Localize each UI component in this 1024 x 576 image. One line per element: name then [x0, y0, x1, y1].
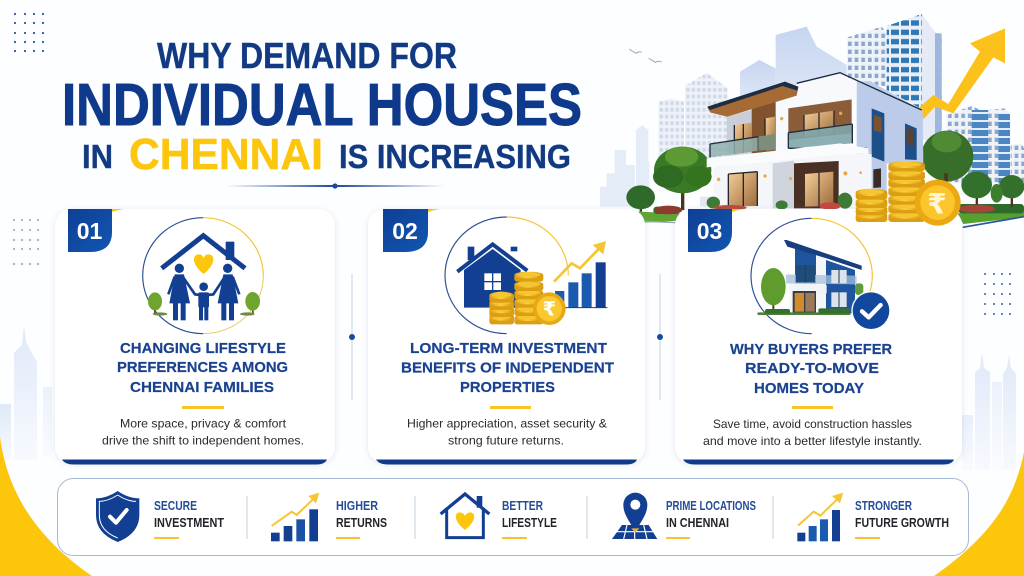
- benefit 1: secure investment: INVESTMENT: [154, 516, 224, 530]
- upper wood recess: [788, 99, 852, 140]
- card 1 heading: CHENNAI FAMILIES: [130, 379, 274, 396]
- pale towers: [658, 27, 847, 167]
- icon: shield: [96, 491, 139, 542]
- title: [62, 35, 582, 179]
- benefit 3: better lifestyle: [441, 494, 557, 539]
- card separator 2: [657, 274, 663, 400]
- panel: card 2: [368, 209, 645, 464]
- card 1 badge: [68, 209, 124, 252]
- card 3 heading: READY-TO-MOVE: [745, 360, 879, 377]
- benefit 2: higher returns: RETURNS: [336, 516, 387, 530]
- card 1 accent: [182, 406, 224, 409]
- card 1 bottom bar: [62, 460, 327, 464]
- white tower: [847, 27, 887, 87]
- yellow arrow: [919, 28, 1005, 119]
- card 2 body: [407, 416, 607, 448]
- coins on top of card 3: [856, 161, 961, 226]
- yellow corner: left: [0, 437, 92, 576]
- decorative dots: left middle: [13, 219, 39, 265]
- title line 3: IN: [82, 138, 113, 175]
- card 3 heading: WHY BUYERS PREFER: [730, 341, 892, 358]
- house: [654, 73, 995, 214]
- lights: [717, 112, 862, 181]
- card 1 body: More space, privacy & comfort: [120, 416, 287, 430]
- card 2 body: strong future returns.: [448, 434, 564, 448]
- benefit 4: prime locations: IN CHENNAI: [666, 516, 729, 530]
- upper white block: [776, 73, 857, 152]
- card 3 badge: 03: [697, 218, 722, 244]
- card 3 heading: HOMES TODAY: [754, 380, 864, 397]
- benefit 2: higher returns: [271, 493, 387, 541]
- card 2 badge: 02: [392, 218, 418, 244]
- plants: [654, 193, 995, 214]
- middle slab: [707, 143, 868, 167]
- card 2 icon: house and coins: [445, 217, 607, 334]
- benefit 1: secure investment: SECURE: [154, 499, 197, 513]
- shrubs: [653, 204, 1024, 214]
- card 2 heading: PROPERTIES: [460, 379, 555, 396]
- card 3 body: Save time, avoid construction hassles: [713, 417, 912, 431]
- title divider: [225, 183, 445, 189]
- card 3 body: and move into a better lifestyle instantly.: [703, 434, 922, 448]
- benefit 3: better lifestyle: LIFESTYLE: [502, 516, 557, 530]
- card 3 bottom bar: [683, 460, 954, 464]
- card 1 heading: PREFERENCES AMONG: [117, 359, 288, 376]
- yellow corner: right: [934, 452, 1024, 576]
- card 2 accent: [490, 406, 531, 409]
- card 1 body: drive the shift to independent homes.: [102, 434, 304, 448]
- benefit 3: better lifestyle: BETTER: [502, 499, 543, 513]
- card 1 body: [102, 416, 304, 448]
- panel: card 1: [55, 209, 335, 464]
- card 1 heading: [117, 340, 288, 396]
- card 2 heading: [401, 340, 614, 396]
- benefit 5: stronger future growth: STRONGER: [855, 499, 912, 513]
- card 2 bottom bar: [376, 460, 637, 464]
- benefit 5: stronger future growth: FUTURE GROWTH: [855, 516, 949, 530]
- benefit 1: secure investment: [96, 491, 224, 542]
- card 1 heading: CHANGING LIFESTYLE: [120, 340, 286, 357]
- card 2 badge: [383, 209, 440, 252]
- roof canopy: [707, 82, 798, 117]
- panel: card 3: [675, 209, 962, 464]
- tree left small: [626, 185, 655, 212]
- card 2 body: Higher appreciation, asset security &: [407, 416, 607, 430]
- card 2 icon: house and coins: ₹: [543, 298, 556, 321]
- card 3 body: [703, 417, 922, 448]
- coins on top of card 3: ₹: [927, 187, 947, 220]
- title line 3: CHENNAI: [129, 130, 323, 179]
- card 3 accent: [792, 406, 833, 409]
- title line 2: INDIVIDUAL HOUSES: [62, 72, 582, 138]
- balconies: [710, 137, 758, 157]
- benefit 5: stronger future growth: [797, 493, 949, 541]
- ground floor: [713, 154, 872, 208]
- tree left large: [653, 147, 712, 210]
- benefit 4: prime locations: [612, 493, 756, 539]
- right towers: [947, 106, 1024, 183]
- blue tower: [887, 14, 942, 140]
- icon: home heart: [441, 494, 489, 538]
- title line 3: [82, 130, 571, 179]
- tree right large: [921, 131, 973, 190]
- benefit 2: higher returns: HIGHER: [336, 499, 378, 513]
- card 1 icon: family house: [143, 218, 263, 334]
- title line 1: WHY DEMAND FOR: [157, 35, 457, 76]
- card 2 heading: LONG-TERM INVESTMENT: [410, 340, 607, 357]
- card 2 heading: BENEFITS OF INDEPENDENT: [401, 360, 614, 376]
- side wall: [857, 81, 923, 208]
- birds: [629, 49, 662, 62]
- lawn: [638, 208, 1024, 227]
- left upper wall: [727, 110, 752, 157]
- benefit 4: prime locations: PRIME LOCATIONS: [666, 499, 756, 513]
- card 3 icon: modern house: [751, 218, 891, 334]
- strip dividers: [247, 496, 773, 539]
- distant skyline: [600, 125, 649, 207]
- icon: growth chart: [271, 493, 319, 541]
- card 3 badge: [688, 209, 744, 252]
- side dark panels: [872, 108, 884, 162]
- icon: map pin: [612, 493, 657, 539]
- right faint skyline: [962, 352, 1016, 470]
- title line 3: IS INCREASING: [339, 138, 571, 175]
- card 1 badge: 01: [77, 218, 102, 244]
- icon: growth chart: [797, 493, 843, 541]
- card 3 heading: [730, 341, 892, 397]
- left faint skyline: [0, 325, 52, 460]
- decorative dots: right: [984, 273, 1011, 315]
- panel: benefits strip: [58, 478, 968, 556]
- card separator 1: [349, 274, 355, 400]
- hero illustration: [600, 14, 1024, 227]
- trees right small: [961, 172, 1024, 207]
- decorative dots: top left: [14, 13, 44, 52]
